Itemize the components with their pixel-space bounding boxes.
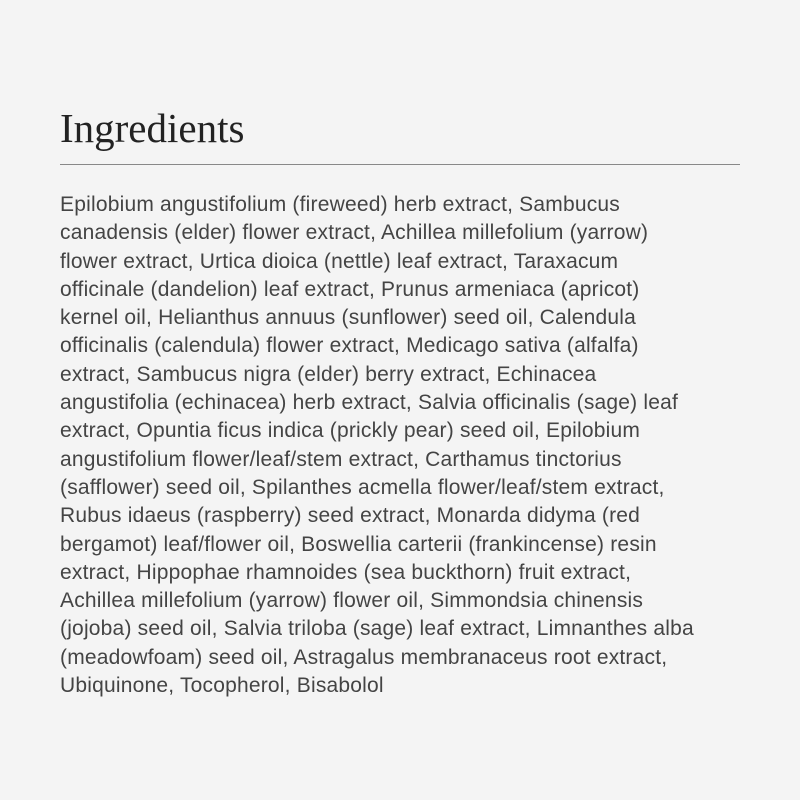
ingredients text block: (jojoba) seed oil, Salvia triloba (sage) leaf extract, Limnanthes alba <box>60 617 694 640</box>
ingredients text block: (safflower) seed oil, Spilanthes acmella flower/leaf/stem extract, <box>60 476 665 499</box>
ingredients text block: Achillea millefolium (yarrow) flower oil, Simmondsia chinensis <box>60 589 643 612</box>
ingredients text block: Ubiquinone, Tocopherol, Bisabolol <box>60 674 384 697</box>
ingredients text block: officinalis (calendula) flower extract, Medicago sativa (alfalfa) <box>60 334 639 357</box>
ingredients text block: Rubus idaeus (raspberry) seed extract, Monarda didyma (red <box>60 504 640 527</box>
ingredients text block: Epilobium angustifolium (fireweed) herb extract, Sambucus <box>60 193 620 216</box>
title: Ingredients <box>60 105 244 151</box>
ingredients text block: officinale (dandelion) leaf extract, Prunus armeniaca (apricot) <box>60 278 640 301</box>
ingredients text block: angustifolia (echinacea) herb extract, Salvia officinalis (sage) leaf <box>60 391 678 414</box>
ingredients text block: bergamot) leaf/flower oil, Boswellia carterii (frankincense) resin <box>60 533 657 556</box>
ingredients text block: canadensis (elder) flower extract, Achillea millefolium (yarrow) <box>60 221 648 244</box>
ingredients text block: kernel oil, Helianthus annuus (sunflower) seed oil, Calendula <box>60 306 636 329</box>
ingredients text block: extract, Hippophae rhamnoides (sea buckthorn) fruit extract, <box>60 561 631 584</box>
ingredients text block: extract, Sambucus nigra (elder) berry extract, Echinacea <box>60 363 596 386</box>
ingredients text block: flower extract, Urtica dioica (nettle) leaf extract, Taraxacum <box>60 250 618 273</box>
ingredients text block: (meadowfoam) seed oil, Astragalus membranaceus root extract, <box>60 646 667 669</box>
ingredients text block <box>60 193 694 697</box>
ingredients text block: extract, Opuntia ficus indica (prickly pear) seed oil, Epilobium <box>60 419 640 442</box>
ingredients text block: angustifolium flower/leaf/stem extract, Carthamus tinctorius <box>60 448 622 471</box>
